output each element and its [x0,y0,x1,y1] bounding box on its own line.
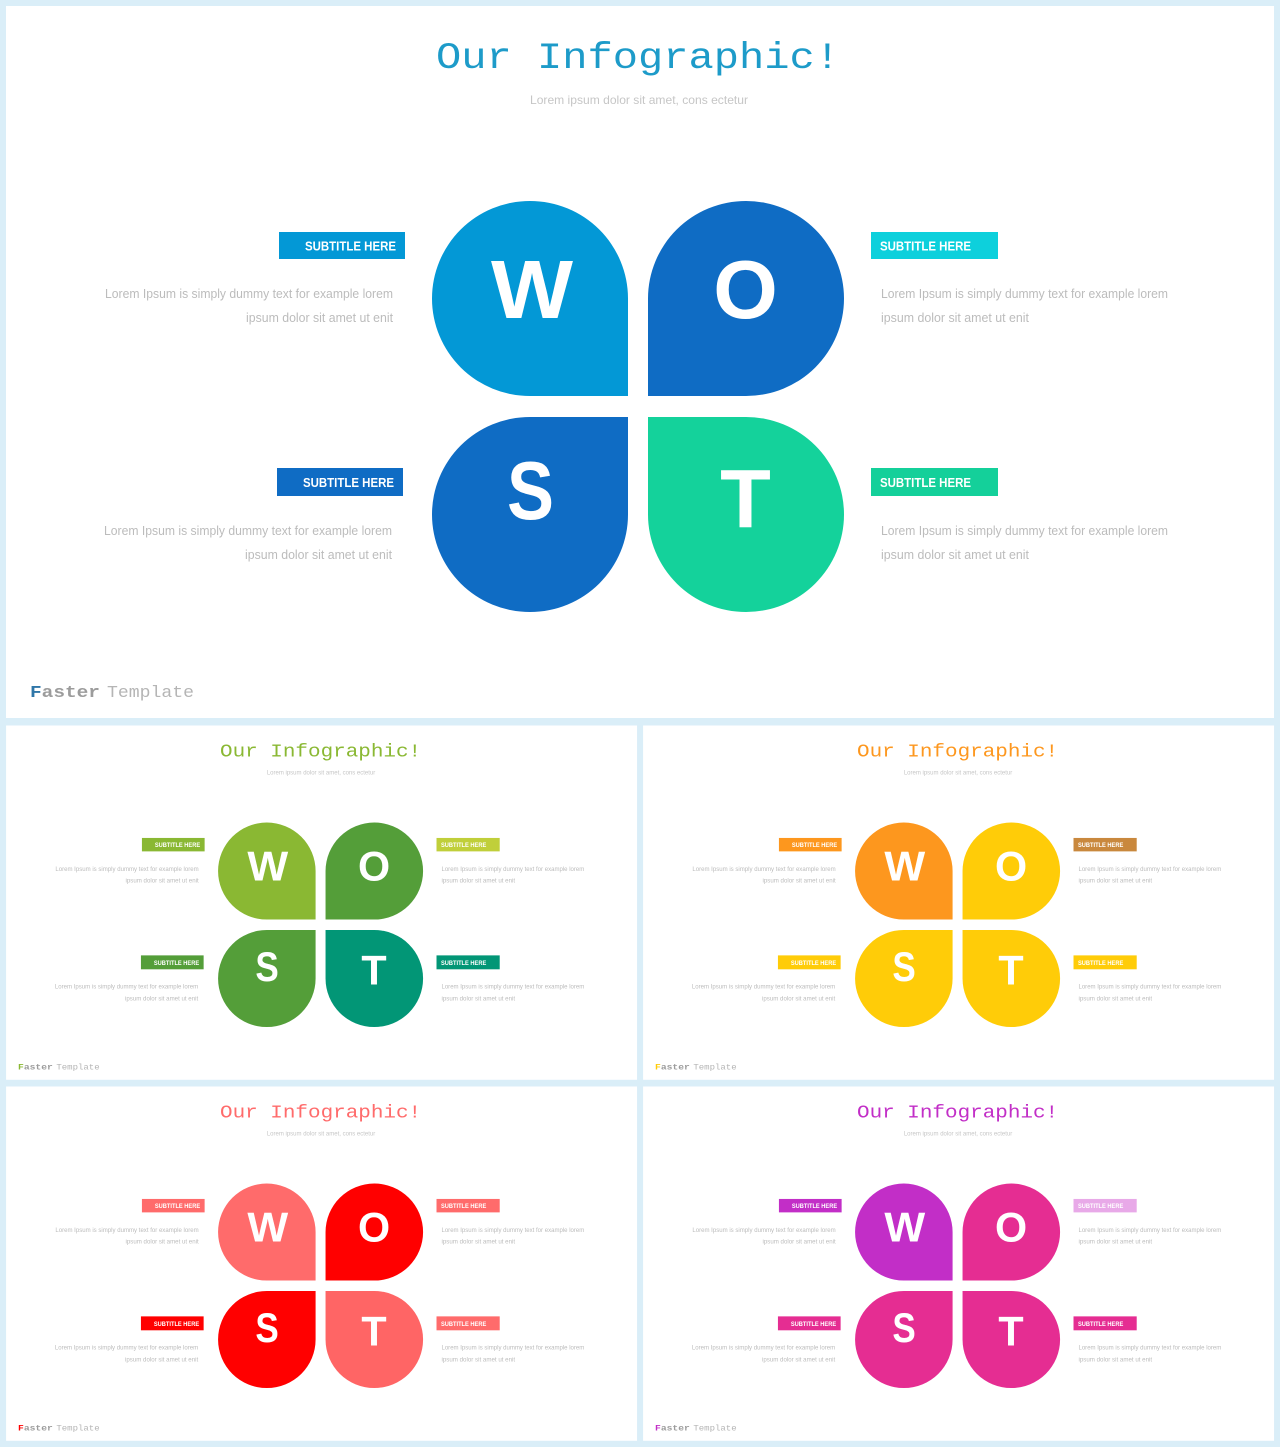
petal: O [326,823,423,920]
label: bottom right: SUBTITLE HERE [1078,960,1124,967]
text block: bottom left: Lorem Ipsum is simply dummy text for example lorem [692,1345,835,1352]
text block: top left: ipsum dolor sit amet ut enit [246,311,394,325]
petal: S [218,930,316,1027]
title: Our Infographic! [220,1102,421,1123]
text block: bottom left [692,1345,835,1364]
petal: S [855,1291,953,1388]
footer brand: Faster [18,1063,53,1072]
label: bottom left [277,468,403,496]
footer brand: Template [693,1062,737,1072]
text block: bottom left: Lorem Ipsum is simply dummy text for example lorem [55,1345,198,1352]
label: bottom left: SUBTITLE HERE [303,475,394,490]
panel: orange slide [643,725,1274,1080]
footer brand: Faster [30,683,100,702]
text block: top left: ipsum dolor sit amet ut enit [126,878,199,885]
petal: S [855,930,953,1027]
text block: top left: ipsum dolor sit amet ut enit [763,878,836,885]
label: bottom right: SUBTITLE HERE [441,960,487,967]
label: top right [437,838,500,851]
subtitle text: Lorem ipsum dolor sit amet, cons ectetur [267,1131,375,1137]
label: top right: SUBTITLE HERE [441,842,487,849]
footer brand [655,1423,737,1433]
title: Our Infographic! [857,741,1058,762]
label: top left [142,838,205,851]
petal: S [218,1291,316,1388]
petal: S: S [255,1305,279,1351]
label: bottom right [437,955,500,969]
text block: bottom right [441,984,584,1003]
panel: red slide [6,1086,637,1441]
text block: top left [692,866,836,885]
footer brand [30,683,194,702]
petal: S: S [892,1305,916,1351]
petal: O: O [995,1205,1027,1251]
footer brand: Template [56,1423,100,1433]
label: top left [779,838,842,851]
label: bottom right [871,468,998,496]
label: bottom left [778,1316,841,1330]
petal: O [963,823,1060,920]
petal: W: W [884,1205,925,1251]
footer brand [655,1062,737,1072]
label: top right [437,1199,500,1212]
footer brand [18,1423,100,1433]
text block: top right: Lorem Ipsum is simply dummy text for example lorem [441,1227,584,1234]
text block: top right: ipsum dolor sit amet ut enit [881,311,1030,325]
petal: W [432,201,628,396]
petal: S: S [507,444,554,537]
petal: O [648,201,844,396]
text block: top right [441,866,584,885]
footer brand: Template [107,683,194,702]
label: top right [1074,1199,1137,1212]
label: bottom left [141,1316,204,1330]
petal: O: O [358,1205,390,1251]
petal: T [326,930,423,1027]
subtitle text: Lorem ipsum dolor sit amet, cons ectetur [904,770,1012,776]
text block: bottom right: Lorem Ipsum is simply dummy text for example lorem [1078,1345,1221,1352]
text block: top right: ipsum dolor sit amet ut enit [441,1239,515,1246]
text block: top left: ipsum dolor sit amet ut enit [763,1239,836,1246]
text block: top right: Lorem Ipsum is simply dummy text for example lorem [441,866,584,873]
text block: top right: ipsum dolor sit amet ut enit [441,878,515,885]
label: top right: SUBTITLE HERE [1078,842,1124,849]
petal: O: O [713,243,778,336]
footer brand [18,1062,100,1072]
label: bottom right [1074,1316,1137,1330]
text block: top right: ipsum dolor sit amet ut enit [1078,1239,1152,1246]
petal: W: W [247,844,288,890]
text block: top left: Lorem Ipsum is simply dummy text for example lorem [692,866,836,873]
petal: T [326,1291,423,1388]
label: bottom left: SUBTITLE HERE [154,960,200,967]
petal: W: W [884,844,925,890]
label: bottom right [1074,955,1137,969]
text block: bottom left: ipsum dolor sit amet ut enit [125,1357,198,1364]
text block: top right: Lorem Ipsum is simply dummy text for example lorem [1078,1227,1221,1234]
text block: bottom right: ipsum dolor sit amet ut enit [1078,996,1152,1003]
label: top left: SUBTITLE HERE [305,238,396,254]
text block: top left [55,866,199,885]
petal: W [855,823,953,920]
subtitle text: Lorem ipsum dolor sit amet, cons ectetur [904,1131,1012,1137]
petal: W: W [247,1205,288,1251]
text block: top right: ipsum dolor sit amet ut enit [1078,878,1152,885]
title: Our Infographic! [436,38,840,80]
label: bottom left [778,955,841,969]
panel: green slide [6,725,637,1080]
text block: bottom right: Lorem Ipsum is simply dummy text for example lorem [881,524,1168,538]
petal: T [963,930,1060,1027]
label: top left: SUBTITLE HERE [155,1203,201,1210]
subtitle text: Lorem ipsum dolor sit amet, cons ectetur [267,770,375,776]
text block: bottom right: Lorem Ipsum is simply dummy text for example lorem [441,1345,584,1352]
text block: bottom right: ipsum dolor sit amet ut enit [881,548,1030,562]
text block: bottom left [692,984,835,1003]
text block: top right [881,287,1168,325]
text block: top left: ipsum dolor sit amet ut enit [126,1239,199,1246]
text block: top left [105,287,394,325]
label: bottom left: SUBTITLE HERE [791,960,837,967]
footer brand: Faster [18,1424,53,1433]
text block: top left: Lorem Ipsum is simply dummy text for example lorem [105,287,393,301]
label: top right: SUBTITLE HERE [441,1203,487,1210]
petal: O: O [358,844,390,890]
petal: T: T [361,1309,387,1355]
petal: O [963,1184,1060,1281]
label: top left: SUBTITLE HERE [792,1203,838,1210]
text block: top right [441,1227,584,1246]
panel: main blue slide [6,6,1274,718]
petal: W [218,823,316,920]
petal: W: W [491,243,574,336]
label: top right [1074,838,1137,851]
text block: bottom left: Lorem Ipsum is simply dummy text for example lorem [692,984,835,991]
label: top left [142,1199,205,1212]
text block: top right: Lorem Ipsum is simply dummy text for example lorem [881,287,1168,301]
label: bottom right: SUBTITLE HERE [1078,1321,1124,1328]
text block: bottom right [1078,984,1221,1003]
text block: bottom right: ipsum dolor sit amet ut enit [1078,1357,1152,1364]
label: top right: SUBTITLE HERE [880,238,971,254]
subtitle text: Lorem ipsum dolor sit amet, cons ectetur [530,93,748,107]
text block: bottom right: ipsum dolor sit amet ut enit [441,996,515,1003]
label: top left: SUBTITLE HERE [155,842,201,849]
petal: T: T [361,948,387,994]
petal: T: T [720,452,771,545]
text block: top left [55,1227,199,1246]
text block: bottom right [1078,1345,1221,1364]
text block: bottom right [881,524,1168,562]
petal: W [218,1184,316,1281]
text block: bottom left [55,1345,198,1364]
petal: O [326,1184,423,1281]
title: Our Infographic! [857,1102,1058,1123]
footer brand: Template [56,1062,100,1072]
text block: top left: Lorem Ipsum is simply dummy text for example lorem [692,1227,836,1234]
text block: top left: Lorem Ipsum is simply dummy text for example lorem [55,1227,199,1234]
petal: S [432,417,628,612]
label: top left: SUBTITLE HERE [792,842,838,849]
petal: S: S [892,944,916,990]
label: bottom right: SUBTITLE HERE [441,1321,487,1328]
text block: bottom right: Lorem Ipsum is simply dummy text for example lorem [441,984,584,991]
text block: bottom left: ipsum dolor sit amet ut enit [762,1357,835,1364]
text block: bottom right: ipsum dolor sit amet ut enit [441,1357,515,1364]
text block: bottom left [104,524,393,562]
footer brand: Template [693,1423,737,1433]
panel: purple slide [643,1086,1274,1441]
text block: top right [1078,1227,1221,1246]
label: top left [279,232,405,259]
text block: top left: Lorem Ipsum is simply dummy text for example lorem [55,866,199,873]
petal: W [855,1184,953,1281]
petal: T [963,1291,1060,1388]
text block: bottom left [55,984,198,1003]
petal: S: S [255,944,279,990]
text block: bottom left: ipsum dolor sit amet ut enit [125,996,198,1003]
footer brand: Faster [655,1063,690,1072]
text block: bottom right [441,1345,584,1364]
petal: O: O [995,844,1027,890]
text block: bottom left: ipsum dolor sit amet ut enit [762,996,835,1003]
petal: T [648,417,844,612]
label: bottom right: SUBTITLE HERE [880,475,971,490]
petal: T: T [998,1309,1024,1355]
text block: bottom left: Lorem Ipsum is simply dummy text for example lorem [55,984,198,991]
label: top right [871,232,998,259]
text block: top right [1078,866,1221,885]
footer brand: Faster [655,1424,690,1433]
text block: bottom right: Lorem Ipsum is simply dummy text for example lorem [1078,984,1221,991]
label: bottom left: SUBTITLE HERE [791,1321,837,1328]
text block: bottom left: Lorem Ipsum is simply dummy text for example lorem [104,524,392,538]
label: bottom left [141,955,204,969]
label: top left [779,1199,842,1212]
text block: top right: Lorem Ipsum is simply dummy text for example lorem [1078,866,1221,873]
text block: bottom left: ipsum dolor sit amet ut enit [245,548,393,562]
text block: top left [692,1227,836,1246]
label: bottom left: SUBTITLE HERE [154,1321,200,1328]
petal: T: T [998,948,1024,994]
label: top right: SUBTITLE HERE [1078,1203,1124,1210]
label: bottom right [437,1316,500,1330]
title: Our Infographic! [220,741,421,762]
